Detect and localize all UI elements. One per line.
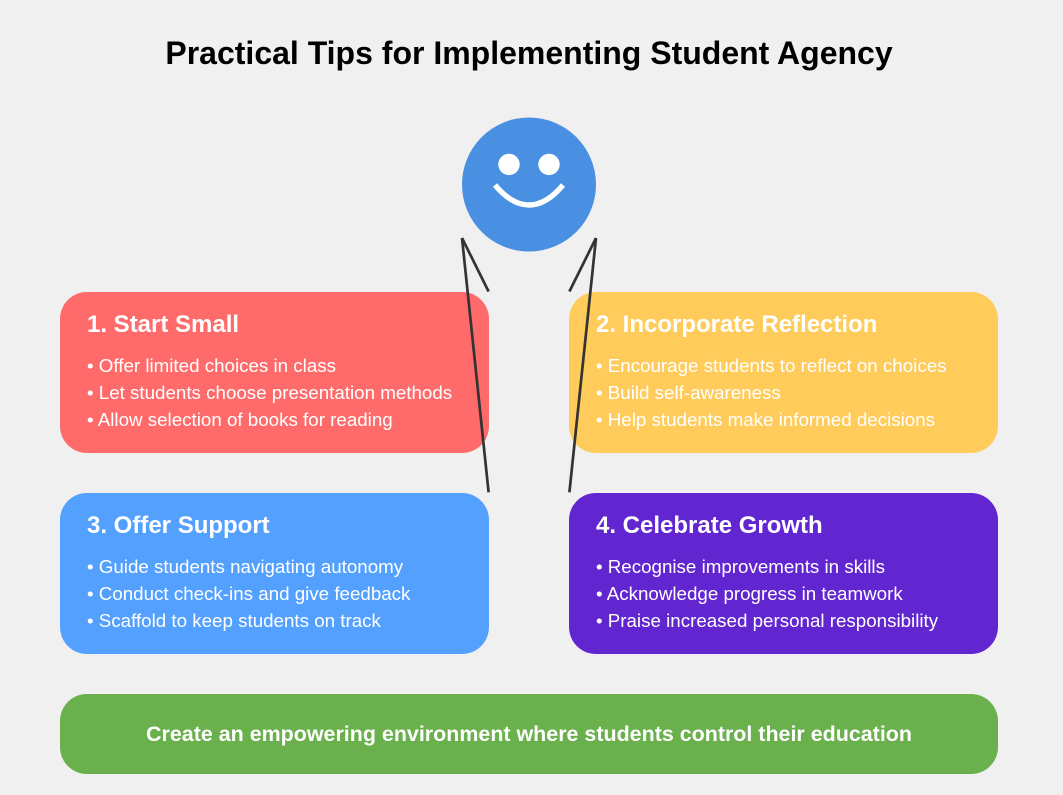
list: Start Small tips	[87, 355, 452, 430]
list: Offer Support tips: • Scaffold to keep students on track	[87, 610, 381, 631]
heading: Offer Support: 3. Offer Support	[87, 512, 270, 539]
arrow: smiley to panel 2	[569, 238, 596, 292]
list: Offer Support tips: • Conduct check-ins and give feedback	[87, 583, 410, 604]
list: Incorporate Reflection tips	[596, 355, 947, 430]
arrow: smiley to panel 1	[462, 238, 489, 292]
list: Celebrate Growth tips: • Acknowledge progress in teamwork	[596, 583, 903, 604]
title: Practical Tips for Implementing Student Agency	[165, 35, 893, 71]
list: Incorporate Reflection tips: • Help students make informed decisions	[596, 409, 935, 430]
list: Celebrate Growth tips: • Praise increased personal responsibility	[596, 610, 938, 631]
list: Start Small tips: • Allow selection of books for reading	[87, 409, 393, 430]
list: Incorporate Reflection tips: • Build self-awareness	[596, 382, 781, 403]
panel: 3. Offer Support	[60, 493, 489, 654]
list: Celebrate Growth tips: • Recognise improvements in skills	[596, 556, 885, 577]
list: Start Small tips: • Let students choose presentation methods	[87, 382, 452, 403]
heading: Celebrate Growth: 4. Celebrate Growth	[596, 512, 823, 539]
arrow: smiley to panel 3	[462, 238, 489, 492]
arrow: smiley to panel 4	[569, 238, 596, 492]
panel: 1. Start Small	[60, 292, 489, 453]
list: Offer Support tips: • Guide students navigating autonomy	[87, 556, 403, 577]
list: Celebrate Growth tips	[596, 556, 938, 631]
list: Incorporate Reflection tips: • Encourage students to reflect on choices	[596, 355, 947, 376]
banner text: Create an empowering environment where students control their education	[146, 722, 912, 746]
panel: 4. Celebrate Growth	[569, 493, 998, 654]
list: Start Small tips: • Offer limited choices in class	[87, 355, 336, 376]
heading: Start Small: 1. Start Small	[87, 311, 239, 338]
banner: closing message	[60, 694, 998, 774]
list: Offer Support tips	[87, 556, 410, 631]
icon: smiley face	[462, 118, 596, 252]
heading: Incorporate Reflection: 2. Incorporate Reflection	[596, 311, 877, 338]
panel: 2. Incorporate Reflection	[569, 292, 998, 453]
